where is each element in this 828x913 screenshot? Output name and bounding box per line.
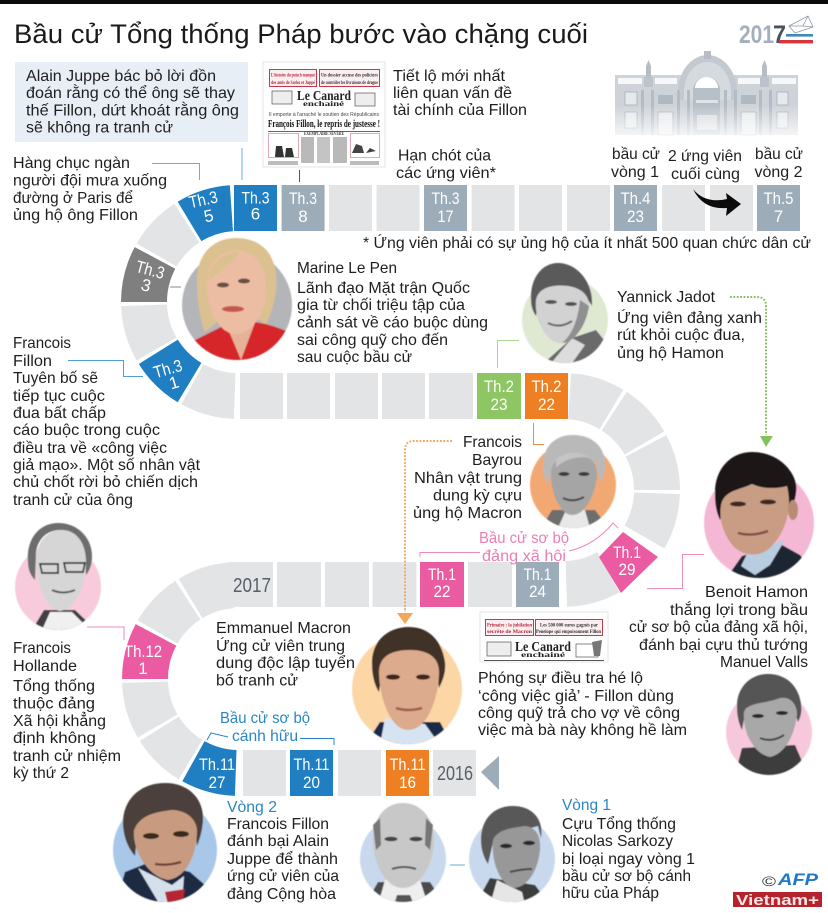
date: March 6: Th.3 [242,188,270,208]
portrait: Marine Le Pen [182,238,295,365]
text: round 1: vòng 1 [611,164,659,181]
text: Francois Bayrou: Francois [463,434,522,451]
date: May 7: Th.5 [764,189,794,208]
label: right primary: Bầu cử sơ bộ [220,710,310,727]
text: Benoit Hamon: thắng lợi trong bầu [670,600,808,619]
text: Emmanuel Macron: Ứng cử viên trung [216,636,345,655]
date: Nov 16: 16 [399,773,416,792]
newspaper front page 1: des amis de Sarko et Juppé [271,80,315,86]
date: May 7: 7 [774,207,783,226]
text: round 2: bầu cử [755,146,803,163]
date: Dec 1 [124,642,162,678]
arrow: Bayrou to Macron [397,441,452,624]
date: Feb 23: Th.2 [484,377,514,396]
date: March 17 [424,185,467,231]
date: March 5 [187,188,223,229]
text: final two: cuối cùng [671,166,740,183]
newspaper front page 2: Les 500 000 euros gagnés par [540,622,598,628]
date: Nov 20: 20 [303,773,320,792]
date: March 5: Th.3 [187,188,219,212]
text: round 2 Fillon [227,799,339,903]
building: Elysee palace [615,51,798,136]
arrow: Jadot to Hamon [730,297,773,447]
text: round 1 [611,146,660,181]
text: round 1 Sarkozy: hữu của Pháp [562,885,659,902]
date: Jan 29: 29 [618,560,636,579]
text: Francois Fillon: giả mạo». Một số nhân vật [13,457,201,474]
portrait: Francois Fillon [113,783,217,905]
year label 2016: 2016 [437,763,473,785]
text: round 1 Sarkozy: bị loại ngay vòng 1 [562,851,695,868]
date: March 6 [234,185,277,231]
date: Jan 22 [420,562,464,607]
label: right primary [220,710,310,745]
date: Nov 20 [290,750,333,796]
credit: AFP: AFP [777,870,819,889]
text: round 1 Sarkozy: Cựu Tổng thống [562,815,676,833]
text: Canard revelation: tài chính của Fillon [393,102,527,119]
footnote: * Ứng viên phải có sự ủng hộ của ít nhất 500 quan chức dân cử [363,233,811,252]
portrait: Benoit Hamon [704,452,820,580]
text: Benoit Hamon: cử sơ bộ của đảng xã hội, [629,619,808,636]
date: March 5: 5 [202,206,215,226]
text: Emmanuel Macron: dung độc lập tuyển [216,654,355,672]
text: crowd in Paris: đường ở Paris để [13,189,133,207]
text: Francois Hollande: định không [13,730,96,747]
date: Nov 27: Th.11 [199,755,235,774]
text: Marine Le Pen [297,260,488,366]
logo: 2017 election envelope: 201 [739,21,774,49]
text: Francois Fillon: tiếp tục cuộc [13,388,105,405]
date: Nov 16: Th.11 [390,755,426,774]
text: Canard revelation: liên quan vấn đề [393,85,512,102]
text: final two: 2 ứng viên [668,148,742,165]
newspaper front page 1: Il emporte à l'arraché le soutien des Républicains [269,112,379,118]
date: Feb 23 [477,373,521,419]
text: Francois Fillon: chủ chốt rời bỏ chiến dịch [13,474,198,491]
date: May 7 [757,185,800,231]
date: Nov 20: Th.11 [294,755,330,774]
date: March 1: 1 [167,372,181,393]
text: Yannick Jadot: rút khỏi cuộc đua, [617,327,745,344]
text: Francois Hollande: Hollande [13,658,77,675]
date: March 8 [282,185,325,231]
connector lines [68,148,704,865]
date: Feb 22: 22 [538,395,555,414]
text: round 2 Fillon: đánh bại Alain [227,833,329,850]
portrait: Manuel Valls [726,674,812,775]
newspaper front page 2: Le Canard [515,640,571,655]
date: March 8: 8 [298,207,308,226]
text: round 2 Fillon: ứng cử viên của [227,868,339,885]
text: Benoit Hamon [629,584,808,671]
text: Francois Bayrou: dung kỳ cựu [433,488,522,504]
text: Francois Bayrou: Nhân vật trung [414,470,522,487]
newspaper front page 1 [263,62,385,167]
text: crowd in Paris [13,155,167,224]
portrait: Alain Juppe [360,803,446,905]
text: round 2 Fillon: Juppe để thành [227,850,338,868]
date: Jan 22: Th.1 [428,565,456,584]
newspaper front page 1: enchainé [303,100,344,108]
date: March 6: 6 [251,204,260,224]
credit: AFP [762,870,819,889]
label: socialist primary: đảng xã hội [482,548,566,565]
date: Jan 24: Th.1 [524,565,552,584]
text: fake job report: công quỹ trả cho vợ về công [478,705,680,722]
year label 2017: 2017 [233,575,271,597]
text: Francois Hollande: Francois [13,640,71,657]
newspaper front page 1: de contrôler les livraisons de drogue [321,80,378,86]
portrait: Yannick Jadot [522,263,612,370]
text: Yannick Jadot: ủng hộ Hamon [617,345,724,362]
text: Francois Hollande: Xã hội khẳng [13,711,106,730]
newspaper front page 2: secrète de Macron [487,629,532,635]
text: round 1 Sarkozy: Vòng 1 [562,797,611,814]
text: crowd in Paris: Hàng chục ngàn [13,155,130,172]
text: candidate deadline [396,148,496,182]
date: April 23: 23 [627,207,644,226]
date: March 1 [151,356,189,397]
date: March 17: Th.3 [432,189,460,208]
date: Nov 16 [386,750,429,796]
newspaper front page 1: EXEMPLAIRE SÉVÈRE [304,129,344,137]
text: candidate deadline: Hạn chót của [398,148,491,164]
text: round 1 Sarkozy [562,797,695,902]
newspaper front page 2: Primaire : la jubilation [487,622,532,628]
text: Benoit Hamon: đánh bại cựu thủ tướng [639,637,808,654]
timeline: lower row [229,562,559,607]
portrait: Francois Bayrou [530,435,616,530]
date: Jan 24 [516,562,559,607]
text: fake job report: ‘công việc giả’ - Fillon dùng [478,688,674,705]
date: Dec 1: Th.12 [124,642,162,661]
logo: 2017 election envelope [739,16,813,49]
credit: Vietnam+: Vietnam+ [736,893,819,909]
text: Francois Fillon: Francois [13,335,71,352]
newspaper front page 2: enchainé [521,651,565,659]
newspaper front page 1: Un dossier accuse des policiers [321,72,378,78]
text: round 2 [754,146,803,181]
logo: 2017 election envelope: 7 [773,21,786,49]
date: Nov 27 [199,755,235,792]
text: Francois Bayrou: Bayrou [472,452,522,469]
text: crowd in Paris: ủng hộ ông Fillon [13,207,138,224]
text: Marine Le Pen: cảnh sát về cáo buộc dùng [297,314,488,332]
text: Benoit Hamon: Benoit Hamon [705,584,808,601]
date: Dec 1: 1 [138,659,148,678]
date: March 3 [130,257,167,298]
text: Marine Le Pen: sau cuộc bầu cử [297,349,412,366]
date: March 1: Th.3 [151,356,185,382]
timeline: arc lower-left [122,562,236,796]
date: April 23 [614,185,657,231]
credit: Vietnam+ [733,892,822,909]
text: Francois Fillon: Tuyên bố sẽ [13,370,98,387]
top black bar [0,0,828,4]
timeline: bottom row [243,750,476,796]
text: round 1: bầu cử [612,146,660,163]
newspaper front page 2 [480,612,608,662]
text: candidate deadline: các ứng viên* [396,165,496,182]
date: March 3: Th.3 [134,257,167,283]
text: Francois Hollande: tranh cử nhiệm [13,748,121,765]
date: Jan 29 [599,532,658,593]
text: Francois Fillon: đua bất chấp [13,405,106,422]
text: round 2: vòng 2 [754,164,802,181]
text: Francois Bayrou [413,434,522,522]
newspaper front page 1: L'histoire du putsch manqué [271,72,315,78]
date: Nov 27: 27 [208,773,226,792]
timeline: arc right [566,373,680,607]
text: fake job report [478,670,687,739]
text: Francois Fillon: điều tra về «công việc [13,440,167,457]
panel: Juppe note: Alain Juppe bác bỏ lời đồn [26,68,216,85]
label: socialist primary: Bầu cử sơ bộ [479,530,569,547]
text: Yannick Jadot: Ứng viên đảng xanh [617,308,762,327]
text: Francois Hollande: Tổng thống [13,677,95,695]
text: Francois Fillon: Fillon [13,353,52,370]
text: Francois Hollande [13,640,121,782]
text: Francois Hollande: thuộc đảng [13,696,95,712]
text: Marine Le Pen: Lãnh đạo Mặt trận Quốc [297,280,470,297]
portrait: Emmanuel Macron [352,627,462,745]
portrait: Nicolas Sarkozy [469,806,555,905]
date: Jan 24: 24 [529,582,546,601]
text: Emmanuel Macron: Emmanuel Macron [216,620,351,637]
text: fake job report: Phóng sự điều tra hé lộ [478,670,643,687]
text: Canard revelation: Tiết lộ mới nhất [393,68,506,85]
date: March 3: 3 [139,275,153,296]
label: socialist primary [479,530,569,565]
panel: Juppe note [15,62,248,142]
text: Canard revelation [393,68,527,119]
date: April 23: Th.4 [620,189,650,208]
text: fake job report: việc mà bà này không hề làm [478,722,687,739]
text: round 2 Fillon: Francois Fillon [227,816,329,833]
text: Francois Fillon: tranh cử của ông [13,492,133,509]
panel: Juppe note: đoán rằng có thể ông sẽ thay [26,83,235,102]
newspaper front page 2: Penelope qui empoisonnent Fillon [536,629,601,635]
text: Marine Le Pen: sai công quỹ cho đến [297,332,448,349]
text: Marine Le Pen: Marine Le Pen [297,260,397,277]
label: right primary: cánh hữu [232,728,298,745]
arrow: timeline start [481,756,499,790]
timeline: arc top-left [121,185,236,419]
date: Jan 29: Th.1 [613,543,641,562]
date: Feb 22 [525,373,568,419]
text: Francois Bayrou: ủng hộ Macron [413,505,522,522]
credit: AFP: © [762,873,777,889]
portrait: Francois Hollande [15,523,101,630]
text: Benoit Hamon: Manuel Valls [720,654,808,671]
date: Feb 22: Th.2 [532,377,562,396]
text: round 2 Fillon: đảng Cộng hòa [227,886,336,903]
newspaper front page 1: Le Canard [297,89,351,104]
text: round 2 Fillon: Vòng 2 [227,799,277,816]
title: Bầu cử Tổng thống Pháp bước vào chặng cuối [14,19,588,49]
text: Francois Fillon: cáo buộc trong cuộc [13,422,160,439]
text: Emmanuel Macron [216,620,355,690]
text: Marine Le Pen: gia từ chối triệu tập của [297,297,465,314]
text: round 1 Sarkozy: bầu cử sơ bộ cánh [562,868,691,885]
arrow: round 1 to round 2 [693,189,741,216]
text: Francois Hollande: kỳ thứ 2 [13,765,69,782]
panel: Juppe note: sẽ không ra tranh cử [26,120,173,137]
text: Yannick Jadot: Yannick Jadot [617,289,716,306]
newspaper front page 1: François Fillon, le repris de justesse ! [268,119,380,130]
text: crowd in Paris: người đội mưa xuống [13,172,167,190]
text: round 1 Sarkozy: Nicolas Sarkozy [562,833,673,850]
timeline: top row [234,185,800,231]
timeline: middle row [240,373,568,419]
text: Yannick Jadot [617,289,762,362]
text: Francois Fillon [13,335,201,509]
date: March 8: Th.3 [289,189,317,208]
panel: Juppe note: thế Fillon, dứt khoát rằng ông [26,100,239,120]
date: Feb 23: 23 [490,395,508,414]
date: Jan 22: 22 [434,582,450,601]
text: Emmanuel Macron: bố tranh cử [216,672,298,690]
text: final two [668,148,742,183]
date: March 17: 17 [438,207,454,226]
